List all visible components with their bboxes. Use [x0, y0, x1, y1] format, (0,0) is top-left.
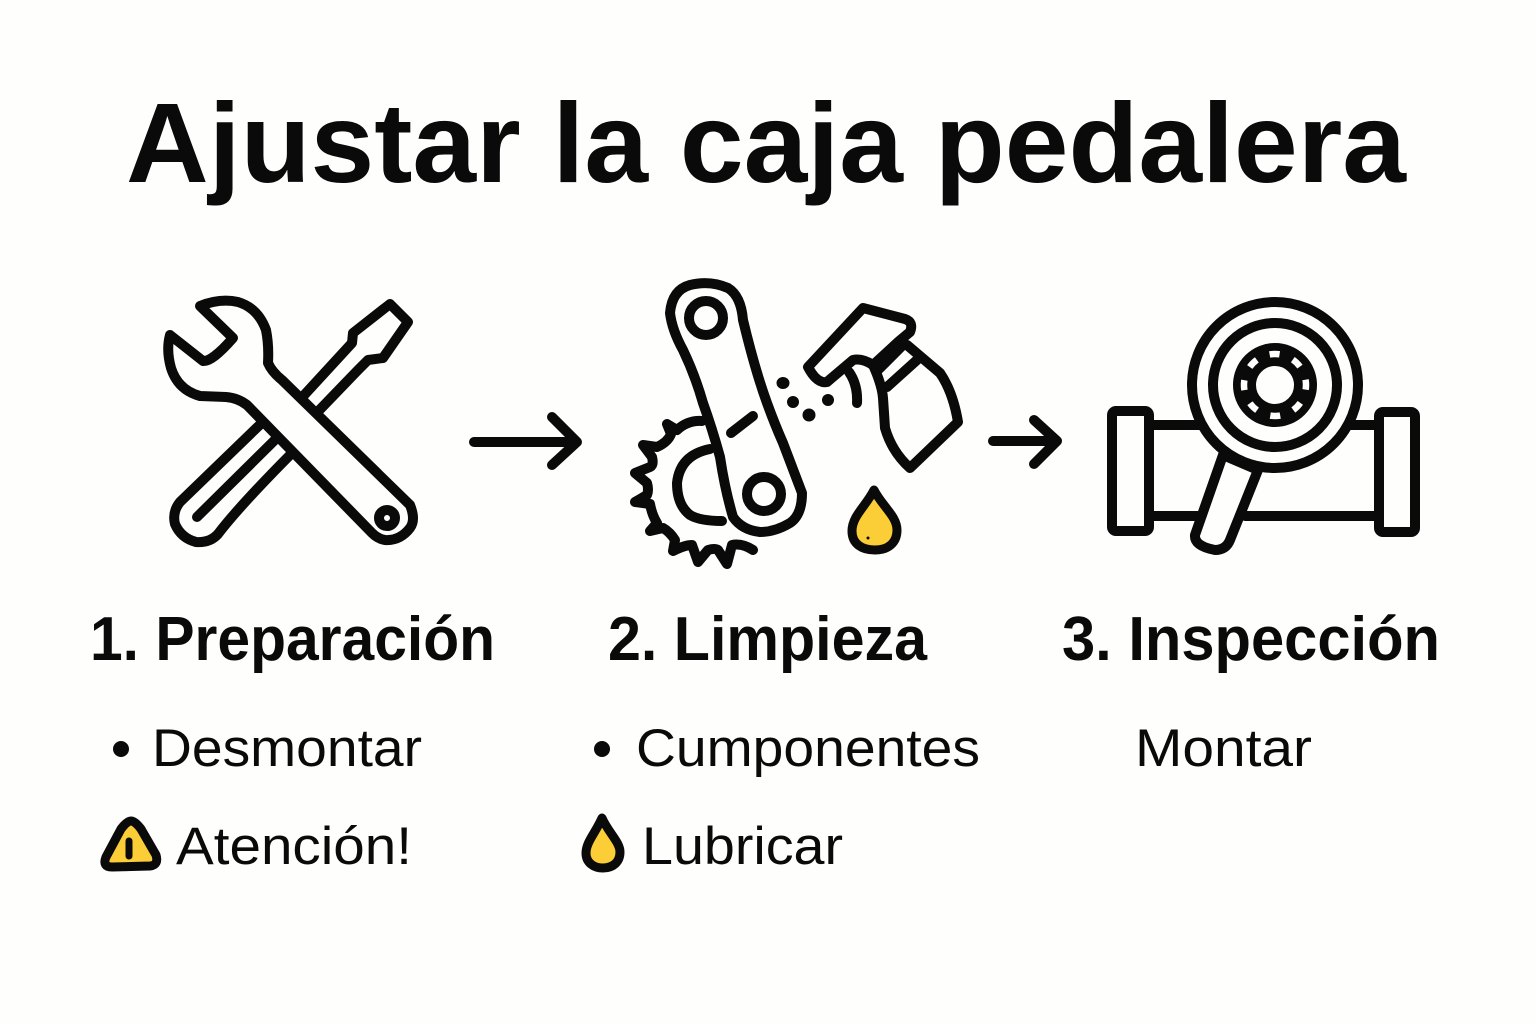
- bullet: Cumponentes: Cumponentes: [636, 719, 980, 778]
- icon: magnifier over bearing housing: [1112, 302, 1415, 550]
- icon: oil drop: [852, 490, 897, 550]
- heading: step 3: 3. Inspección: [1062, 605, 1440, 674]
- spray bottle: [808, 308, 911, 382]
- bullet: Desmontar: Desmontar: [152, 719, 422, 778]
- warning: Atención: Atención!: [176, 817, 412, 876]
- arrow: step 2 to step 3: [993, 420, 1057, 464]
- heading: step 2: 2. Limpieza: [608, 605, 927, 674]
- crank arm: [670, 283, 802, 532]
- arrow: step 1 to step 2: [474, 417, 577, 465]
- chainring teeth: [635, 421, 753, 564]
- chainring inner arc: [677, 449, 722, 521]
- icon: crossed wrench and screwdriver: [168, 301, 413, 542]
- icon: crank, chainring and spray bottle: [635, 283, 958, 564]
- title: Ajustar la caja pedalera: [126, 80, 1407, 206]
- text: Montar: Montar: [1135, 719, 1312, 778]
- tip: Lubricar: Lubricar: [642, 817, 843, 876]
- heading: step 1: 1. Preparación: [90, 605, 495, 674]
